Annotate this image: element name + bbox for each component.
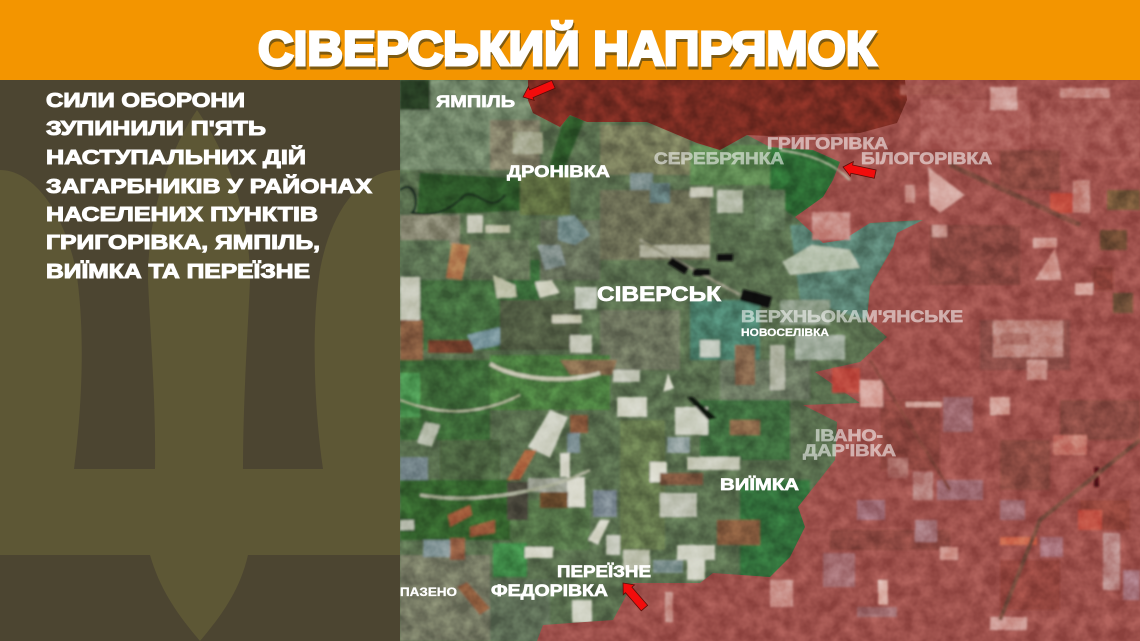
text block: summary: ЗУПИНИЛИ П'ЯТЬ [46, 118, 266, 140]
label: Серебрянка: СЕРЕБРЯНКА [654, 149, 784, 168]
label: Сіверськ: СІВЕРСЬК [597, 283, 721, 306]
map: satellite texture [400, 80, 1140, 641]
label: Ямпіль: ЯМПІЛЬ [436, 92, 515, 111]
label: Дронівка: ДРОНІВКА [507, 162, 610, 181]
icon: trident background [0, 110, 400, 641]
label: Верхньокам'янське: ВЕРХНЬОКАМ'ЯНСЬКЕ [741, 307, 963, 326]
label: Виїмка: ВИЇМКА [720, 475, 799, 494]
arrow: Переїзне [622, 582, 648, 612]
label: Білогорівка: БІЛОГОРІВКА [861, 149, 992, 168]
panel: satellite map [400, 77, 1140, 641]
text block: summary: ЗАГАРБНИКІВ У РАЙОНАХ [46, 174, 373, 198]
header band [0, 0, 1140, 80]
label: Івано-Дар'ївка: ДАР'ІВКА [803, 441, 896, 460]
label: Пазено: ПАЗЕНО [400, 585, 457, 599]
title: СІВЕРСЬКИЙ НАПРЯМОК [258, 21, 877, 76]
label: Івано-Дар'ївка [803, 426, 896, 460]
map: occupied territory fields [665, 85, 1140, 630]
title shadow: СІВЕРСЬКИЙ НАПРЯМОК [259, 24, 878, 79]
panel: left text panel [0, 80, 400, 641]
label: Івано-Дар'ївка: ІВАНО- [815, 426, 883, 445]
map: occupied territory overlay [528, 80, 1140, 641]
arrow: Григорівка [842, 160, 876, 179]
label: Григорівка: ГРИГОРІВКА [767, 134, 888, 153]
text block: summary: СИЛИ ОБОРОНИ [46, 90, 245, 112]
text block: summary: ГРИГОРІВКА, ЯМПІЛЬ, [46, 232, 320, 254]
text block: summary: НАСТУПАЛЬНИХ ДІЙ [46, 145, 306, 169]
text block: summary: ВИЇМКА ТА ПЕРЕЇЗНЕ [46, 260, 310, 283]
label: Федорівка: ФЕДОРІВКА [491, 581, 608, 600]
label: Новоселівка: НОВОСЕЛІВКА [741, 327, 829, 339]
text block: summary: НАСЕЛЕНИХ ПУНКТІВ [46, 204, 318, 226]
arrow: Ямпіль [522, 80, 556, 101]
map: controlled territory fields [400, 80, 923, 641]
label: Переїзне: ПЕРЕЇЗНЕ [557, 562, 651, 581]
text block: summary [46, 90, 373, 283]
